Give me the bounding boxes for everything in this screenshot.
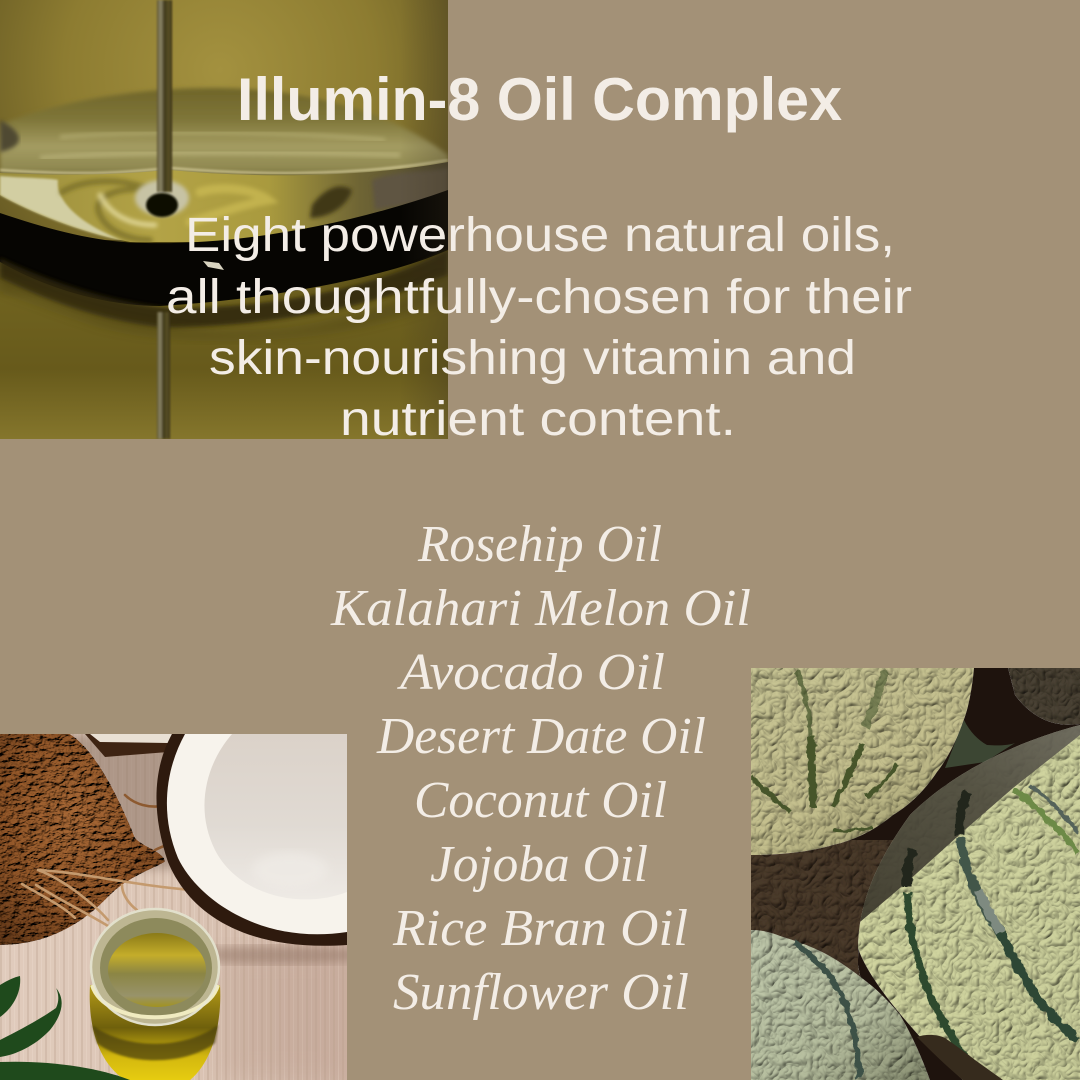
coconut husk: [0, 734, 165, 945]
list of eight oils: Desert Date Oil: [376, 708, 706, 765]
list of eight oils: Jojoba Oil: [430, 836, 648, 893]
stem: [945, 720, 1015, 768]
list of eight oils: [330, 516, 751, 1021]
top-right shaded melon: [1008, 668, 1080, 725]
photo: oil stream pouring into a pool: [0, 0, 448, 439]
intro text block: [166, 209, 912, 446]
list of eight oils: Rosehip Oil: [417, 516, 662, 573]
photo: coconut and oil jar: [0, 734, 370, 1080]
list of eight oils: Kalahari Melon Oil: [330, 580, 751, 637]
melon cast shadow: [917, 1035, 1003, 1080]
intro text block: Eight powerhouse natural oils,: [185, 209, 895, 262]
top melon: [751, 668, 974, 855]
list of eight oils: Rice Bran Oil: [392, 900, 688, 957]
lower melon: [751, 930, 930, 1080]
list of eight oils: Coconut Oil: [414, 772, 667, 829]
cream highlight on the oil surface: [0, 176, 125, 241]
leaves: [0, 976, 130, 1080]
intro text block: skin-nourishing vitamin and: [209, 332, 856, 385]
title: Illumin-8 Oil Complex: [237, 66, 842, 133]
oil stream: [157, 0, 172, 192]
large melon: [850, 715, 1080, 1080]
gold ripple swirl: [62, 181, 268, 240]
coconut fibres: [22, 795, 192, 926]
coconut half shell: [156, 734, 347, 946]
list of eight oils: Sunflower Oil: [393, 964, 689, 1021]
shadow of coconut shell: [216, 944, 347, 966]
back coconut: [85, 734, 175, 757]
oil drop hole: [146, 193, 178, 217]
shaded melon behind: [751, 840, 893, 977]
list of eight oils: Avocado Oil: [397, 644, 665, 701]
photo: cantaloupe melons: [751, 668, 1080, 1080]
intro text block: all thoughtfully-chosen for their: [166, 271, 912, 324]
oil jar: [90, 908, 220, 1080]
intro text block: nutrient content.: [340, 393, 736, 446]
